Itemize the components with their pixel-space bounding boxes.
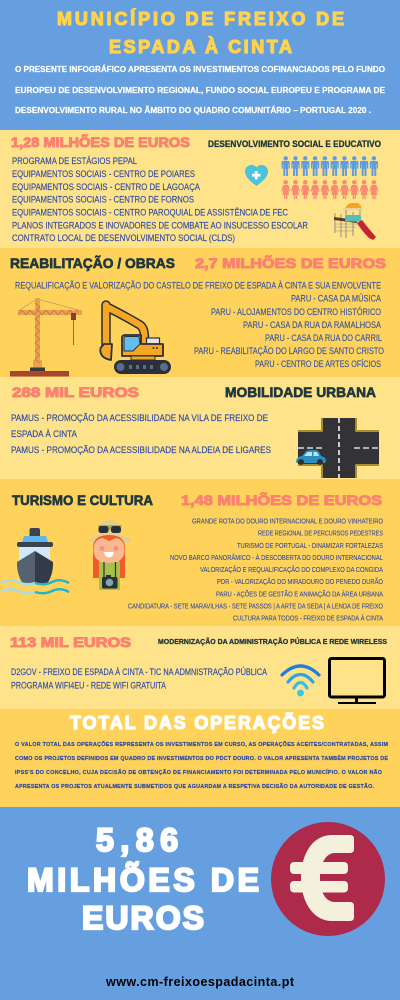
text block: modernisation list bbox=[11, 667, 267, 690]
heading: grand total: EUROS bbox=[82, 900, 204, 936]
text block: total explanation: APRESENTA OS PROJETOS ATUALMENTE SUBMETIDOS QUE AGUARDAM A RESPETIVA DECISÃO DA AUTORIDADE DE GESTÃO. bbox=[15, 783, 374, 790]
heading: works amount: 2,7 MILHÕES DE EUROS bbox=[195, 256, 386, 271]
icon: playground bbox=[334, 203, 376, 240]
text block: mobility list: PAMUS - PROMOÇÃO DA ACESSIBILIDADE NA ALDEIA DE LIGARES bbox=[11, 445, 271, 455]
heading: modernisation of public administration: MODERNIZAÇÃO DA ADMINISTRAÇÃO PÚBLICA E REDE WIRELESS bbox=[158, 637, 387, 646]
heading: tourism amount: 1,48 MILHÕES DE EUROS bbox=[181, 491, 382, 508]
text block: total explanation bbox=[15, 741, 388, 790]
heading: grand total bbox=[27, 822, 259, 936]
icon: euro coin bbox=[271, 822, 385, 936]
text block: works list: PARU - CASA DA RUA DA RAMALHOSA bbox=[243, 320, 381, 330]
text block: tourism list bbox=[128, 516, 383, 622]
text block: works list bbox=[15, 280, 384, 369]
text block: social list bbox=[12, 156, 308, 243]
text block: introduction: DESENVOLVIMENTO RURAL NO ÂMBITO DO QUADRO COMUNITÁRIO – PORTUGAL 2020 . bbox=[15, 104, 371, 115]
icon: tourist bbox=[88, 520, 131, 590]
panel: header background bbox=[0, 0, 400, 130]
text block: social list: EQUIPAMENTOS SOCIAIS - CENTRO DE FORNOS bbox=[12, 194, 194, 204]
text block: social list: EQUIPAMENTOS SOCIAIS - CENTRO PAROQUIAL DE ASSISTÊNCIA DE FEC bbox=[12, 208, 289, 218]
heading: works: REABILITAÇÃO / OBRAS bbox=[10, 254, 175, 271]
title: MUNICÍPIO DE FREIXO DE bbox=[57, 8, 344, 29]
heading: grand total: 5,86 bbox=[96, 822, 178, 858]
panel: total background bbox=[0, 709, 400, 807]
panel: social background bbox=[0, 130, 400, 248]
text block: introduction: EUROPEU DE DESENVOLVIMENTO REGIONAL, FUNDO SOCIAL EUROPEU E PROGRAMA DE bbox=[15, 85, 385, 95]
icon: row of blue people bbox=[282, 156, 378, 176]
panel: modernisation background bbox=[0, 626, 400, 709]
text block: introduction bbox=[15, 63, 385, 115]
text block: mobility list bbox=[11, 413, 271, 455]
text block: modernisation list: PROGRAMA WIFI4EU - REDE WIFI GRATUITA bbox=[11, 680, 166, 690]
icon: heart with cross bbox=[245, 165, 268, 186]
title: ESPADA À CINTA bbox=[109, 36, 292, 57]
text block: introduction: O PRESENTE INFOGRÁFICO APRESENTA OS INVESTIMENTOS COFINANCIADOS PELO FUNDO bbox=[15, 63, 385, 74]
icon: crane bbox=[10, 298, 82, 376]
heading: urban mobility: MOBILIDADE URBANA bbox=[225, 384, 376, 400]
heading: social and educational development: DESENVOLVIMENTO SOCIAL E EDUCATIVO bbox=[208, 139, 381, 149]
icon: row of salmon people bbox=[281, 180, 378, 199]
text block: total explanation: IPSS'S DO CONCELHO, CUJA DECISÃO DE OBTENÇÃO DE FINANCIAMENTO FOI DETERMINADA PELO MUNICÍPIO. O VALOR NÃO bbox=[15, 768, 382, 776]
text block: social list: EQUIPAMENTOS SOCIAIS - CENTRO DE POIARES bbox=[12, 169, 195, 179]
heading: mobility amount: 288 MIL EUROS bbox=[12, 385, 139, 400]
text block: social list: EQUIPAMENTOS SOCIAIS - CENTRO DE LAGOAÇA bbox=[12, 182, 200, 192]
text block: works list: PARU - CASA DA MÚSICA bbox=[291, 294, 381, 304]
heading: grand total: MILHÕES DE bbox=[27, 862, 259, 898]
text block: total explanation: COMO OS PROJETOS DEFINIDOS EM QUADRO DE INVESTIMENTOS DO PDCT DOURO. O VALOR APRESENTA TAMBÉM PROJETOS DE bbox=[15, 754, 388, 762]
text block: mobility list: PAMUS - PROMOÇÃO DA ACESSIBILIDADE NA VILA DE FREIXO DE bbox=[11, 413, 268, 423]
text block: social list: PROGRAMA DE ESTÁGIOS PEPAL bbox=[12, 156, 137, 166]
text block: modernisation list: D2GOV - FREIXO DE ESPADA À CINTA - TIC NA ADMNISTRAÇÃO PÚBLICA bbox=[11, 667, 267, 677]
heading: social amount: 1,28 MILHÕES DE EUROS bbox=[11, 135, 190, 150]
icon: excavator bbox=[100, 305, 171, 374]
heading: total of operations: TOTAL DAS OPERAÇÕES bbox=[70, 712, 324, 733]
heading: modernisation amount: 113 MIL EUROS bbox=[10, 635, 131, 650]
icon: ship bbox=[1, 528, 69, 593]
panel: works background bbox=[0, 248, 400, 377]
text block: total explanation: O VALOR TOTAL DAS OPERAÇÕES REPRESENTA OS INVESTIMENTOS EM CURSO, AS OPERAÇÕES ACEITES/CONTRATADAS, ASSIM bbox=[15, 741, 388, 748]
panel: mobility background bbox=[0, 377, 400, 479]
text block: social list: CONTRATO LOCAL DE DESENVOLVIMENTO SOCIAL (CLDS) bbox=[12, 233, 235, 243]
heading: tourism and culture: TURISMO E CULTURA bbox=[12, 492, 153, 508]
icon: wifi bbox=[282, 666, 319, 695]
icon: road junction with car bbox=[296, 418, 379, 478]
panel: tourism background bbox=[0, 479, 400, 626]
panel: grand total background bbox=[0, 807, 400, 1000]
text block: mobility list: ESPADA À CINTA bbox=[11, 429, 77, 439]
text block: social list: PLANOS INTEGRADOS E INOVADORES DE COMBATE AO INSUCESSO ESCOLAR bbox=[12, 220, 308, 230]
website address: www.cm-freixoespadacinta.pt bbox=[105, 975, 295, 989]
icon: monitor bbox=[330, 658, 384, 704]
title bbox=[57, 8, 344, 57]
